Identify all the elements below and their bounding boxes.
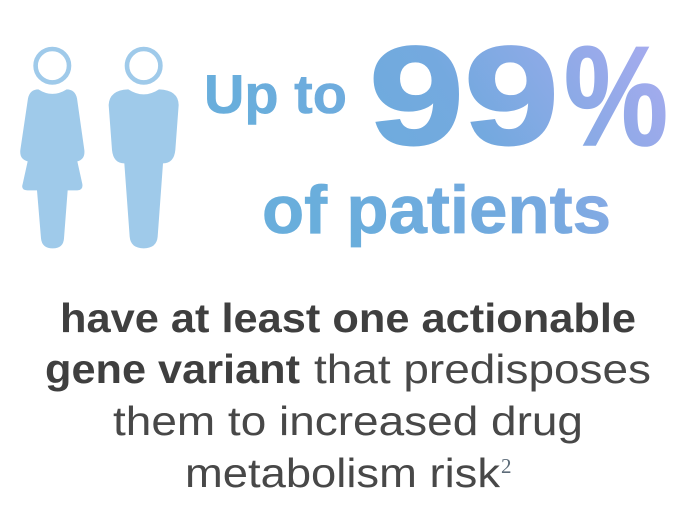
footnote marker: 2 [501,454,512,478]
icon: female patient figure [20,49,84,248]
heading: up to 99% of patients [204,17,668,248]
text block: description [45,295,651,496]
line 3: them to increased drug [113,398,583,444]
icon: male patient figure [109,49,179,248]
line 2: gene variant [45,346,300,392]
line 1: have at least one actionable [60,295,636,341]
statistic: 99: 99 [369,17,559,174]
text: up to: Up to [204,63,347,125]
line 2 continued: that predisposes [314,346,651,392]
text: of patients: of patients [262,172,611,248]
line 4: metabolism risk [185,450,501,496]
statistic: percent sign: % [564,17,668,176]
